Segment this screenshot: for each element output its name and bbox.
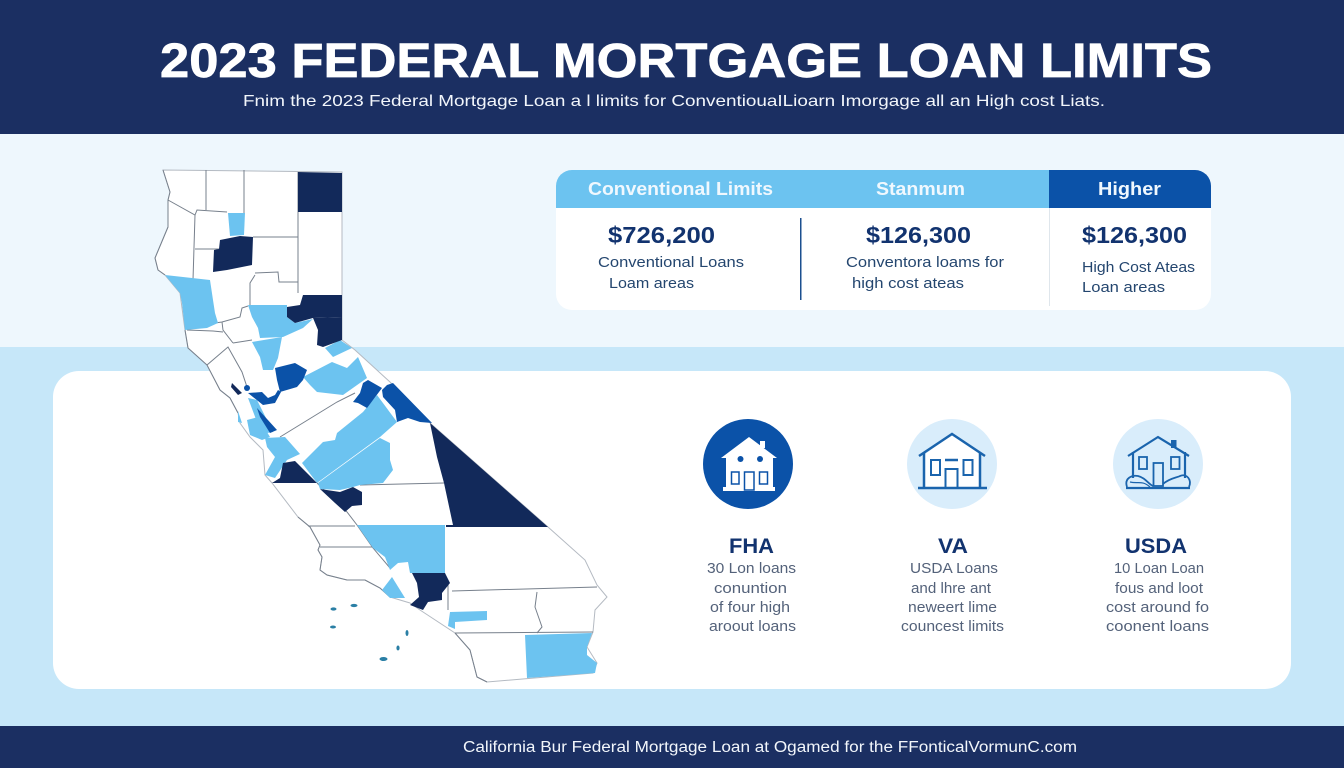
panel: VA text: neweert lime xyxy=(908,600,997,616)
panel: FHA text: conuntion xyxy=(714,581,787,597)
panel: VA text xyxy=(901,535,1004,635)
column 2: Conventora loams for xyxy=(846,254,1004,271)
column 2: $126,300 xyxy=(866,222,971,248)
lower background band xyxy=(0,347,1344,726)
panel: VA text: councest limits xyxy=(901,619,1004,635)
panel: USDA text: fous and loot xyxy=(1115,581,1203,597)
column 1: $726,200 xyxy=(608,222,715,248)
column 3: High Cost Ateas xyxy=(1082,259,1195,276)
panel: FHA text xyxy=(707,535,796,635)
header label: conventional limits: Conventional Limits xyxy=(588,179,773,199)
table header: conventional xyxy=(556,170,1049,208)
header label: higher: Higher xyxy=(1098,179,1161,199)
channel islands xyxy=(330,604,408,661)
light blue counties xyxy=(165,213,597,678)
panel: FHA text: of four high xyxy=(710,600,790,616)
title: 2023 FEDERAL MORTGAGE LOAN LIMITS xyxy=(160,35,1212,88)
column 3: Loan areas xyxy=(1082,279,1165,296)
medium blue counties xyxy=(244,363,432,433)
column 3: $126,300 xyxy=(1082,222,1187,248)
panel: VA text: and lhre ant xyxy=(911,581,991,597)
column 1: Conventional Loans xyxy=(598,254,744,271)
dark navy counties xyxy=(213,172,548,610)
column 1 xyxy=(598,222,744,292)
column 2 xyxy=(846,222,1004,292)
upper background xyxy=(0,134,1344,347)
header label: stanmum: Stanmum xyxy=(876,179,965,199)
subtitle: Fnim the 2023 Federal Mortgage Loan a l limits for ConventiouaILioarn Imorgage all an High cost Liats. xyxy=(243,93,1105,110)
panel: FHA text: aroout loans xyxy=(709,619,796,635)
panel: white lower card xyxy=(53,371,1291,689)
state outline xyxy=(155,170,607,682)
panel: FHA text: FHA xyxy=(729,535,774,558)
icon: FHA house xyxy=(703,419,793,509)
panel: VA text: VA xyxy=(938,535,968,558)
panel: FHA text: 30 Lon loans xyxy=(707,561,796,577)
icon: USDA house xyxy=(1113,419,1203,509)
table header: higher xyxy=(1049,170,1211,208)
panel: USDA text: cost around fo xyxy=(1106,600,1209,616)
panel: USDA text xyxy=(1106,535,1209,635)
column 3 xyxy=(1082,222,1195,296)
icon: VA house xyxy=(907,419,997,509)
panel: USDA text: 10 Loan Loan xyxy=(1114,561,1204,577)
panel: USDA text: coonent loans xyxy=(1106,619,1209,635)
column 2: high cost ateas xyxy=(852,275,964,292)
panel: USDA text: USDA xyxy=(1125,535,1187,558)
panel: header xyxy=(0,0,1344,134)
column 1: Loam areas xyxy=(609,275,694,292)
panel: footer xyxy=(0,726,1344,768)
county borders xyxy=(155,170,597,682)
footer text: California Bur Federal Mortgage Loan at Ogamed for the FFonticalVormunC.com xyxy=(463,739,1077,756)
panel: VA text: USDA Loans xyxy=(910,561,998,577)
map: California counties xyxy=(155,170,607,682)
panel: loan limits table xyxy=(556,170,1211,310)
